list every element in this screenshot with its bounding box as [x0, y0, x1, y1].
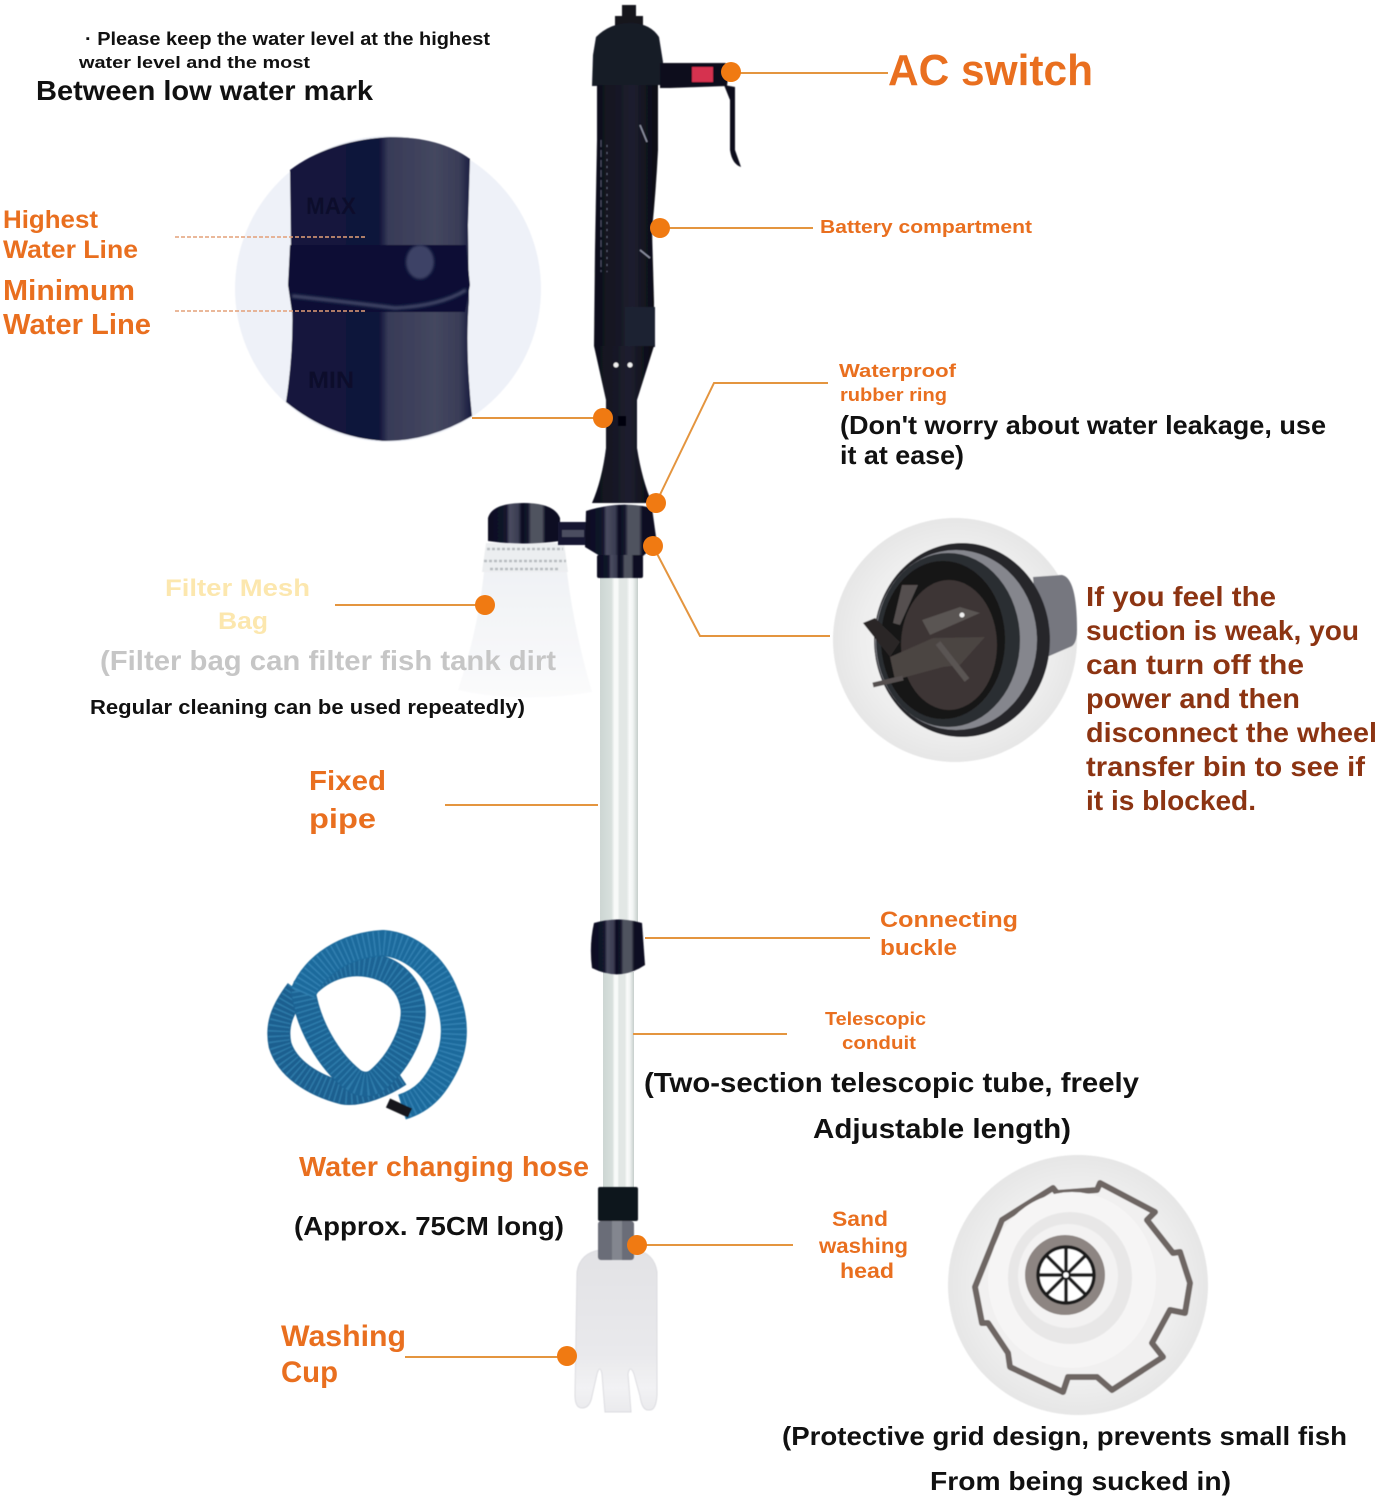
telescopic pipe	[603, 972, 634, 1190]
sand washing head collar	[598, 1187, 638, 1260]
panel: water line detail circle: MAX	[306, 193, 356, 220]
water line labels: Water Line	[3, 236, 138, 264]
leader lines	[335, 73, 888, 1357]
panel: impeller detail circle	[833, 518, 1077, 762]
pump body	[488, 5, 741, 578]
telescopic conduit label: Adjustable length)	[813, 1113, 1071, 1144]
filter mesh bag	[458, 543, 592, 698]
filter bag labels	[90, 575, 556, 719]
main grip	[594, 85, 658, 349]
callout dots	[475, 62, 741, 1366]
fixed pipe label	[309, 765, 386, 834]
telescopic conduit label: Telescopic	[825, 1009, 926, 1029]
suction tip text: can turn off the	[1086, 649, 1304, 680]
water line labels: Water Line	[3, 309, 151, 341]
connecting buckle label	[880, 907, 1018, 960]
outer housing	[874, 543, 1050, 737]
filter bag labels: Filter Mesh	[165, 575, 310, 602]
top knob	[615, 5, 643, 30]
protective grid caption: From being sucked in)	[930, 1466, 1231, 1496]
icon: water changing hose	[279, 943, 454, 1113]
instruction note: water level and the most	[78, 53, 310, 72]
waterproof ring label: (Don't worry about water leakage, use	[840, 410, 1326, 440]
connecting arm	[558, 522, 588, 545]
fixed pipe label: Fixed	[309, 765, 386, 796]
instruction note: Between low water mark	[36, 75, 373, 106]
water changing hose label	[294, 1151, 589, 1241]
telescopic conduit label	[644, 1009, 1139, 1144]
connecting buckle label: Connecting	[880, 907, 1018, 932]
filter bag labels: Bag	[218, 608, 268, 635]
suction tip text: it is blocked.	[1086, 785, 1256, 816]
connecting buckle	[591, 920, 645, 974]
battery compartment label: Battery compartment	[820, 217, 1032, 237]
fixed pipe label: pipe	[309, 803, 376, 834]
waterproof ring label: rubber ring	[840, 385, 947, 405]
panel: water line detail circle: MIN	[308, 367, 354, 394]
AC switch label: AC switch	[888, 46, 1093, 95]
washing cup label: Washing	[281, 1320, 406, 1353]
instruction note	[36, 29, 490, 106]
water line labels: Minimum	[3, 275, 135, 307]
suction tip text: power and then	[1086, 683, 1300, 714]
suction tip text: disconnect the wheel	[1086, 717, 1377, 748]
suction tip text: transfer bin to see if	[1086, 751, 1366, 782]
collar	[585, 505, 657, 556]
sand washing head label	[818, 1208, 908, 1283]
cap	[592, 23, 663, 86]
fixed pipe	[600, 576, 638, 926]
switch handle	[660, 63, 729, 88]
instruction note: · Please keep the water level at the highest	[85, 29, 490, 49]
lower collar	[597, 555, 643, 578]
panel: sand head detail circle	[948, 1155, 1208, 1415]
sand washing head label: washing	[818, 1235, 908, 1258]
washing cup	[575, 1250, 657, 1412]
waterproof ring label: it at ease)	[840, 440, 964, 470]
sand washing head label: Sand	[832, 1208, 888, 1231]
impeller blades	[863, 618, 900, 657]
suction tip text: suction is weak, you	[1086, 615, 1359, 646]
washing cup label: Cup	[281, 1356, 338, 1389]
telescopic conduit label: (Two-section telescopic tube, freely	[644, 1067, 1139, 1098]
washing cup label	[281, 1320, 406, 1389]
filter bag labels: (Filter bag can filter fish tank dirt	[100, 645, 556, 676]
red switch	[692, 67, 713, 82]
water changing hose label: Water changing hose	[299, 1151, 589, 1182]
filter cap	[488, 503, 560, 544]
waterproof ring label: Waterproof	[839, 361, 957, 381]
zoomed pipe section	[286, 137, 472, 441]
telescopic conduit label: conduit	[842, 1033, 916, 1053]
suction tip text: If you feel the	[1086, 581, 1276, 612]
protective grid caption: (Protective grid design, prevents small fish	[782, 1421, 1347, 1451]
sand washing head label: head	[840, 1260, 894, 1283]
protective grid caption	[782, 1421, 1347, 1496]
cup rim	[975, 1183, 1190, 1392]
filter bag labels: Regular cleaning can be used repeatedly)	[90, 697, 525, 719]
outlet stub	[1033, 575, 1077, 660]
tapered neck	[592, 346, 654, 503]
lever hook	[724, 85, 741, 167]
panel: water line detail circle	[235, 136, 541, 442]
waterproof ring label	[839, 361, 1326, 470]
suction tip text	[1086, 581, 1377, 816]
water line labels	[3, 206, 151, 341]
water line dashed leaders	[175, 237, 365, 311]
connecting buckle label: buckle	[880, 935, 957, 960]
water changing hose label: (Approx. 75CM long)	[294, 1211, 564, 1241]
water line labels: Highest	[3, 206, 99, 234]
protective grid	[1038, 1247, 1094, 1303]
